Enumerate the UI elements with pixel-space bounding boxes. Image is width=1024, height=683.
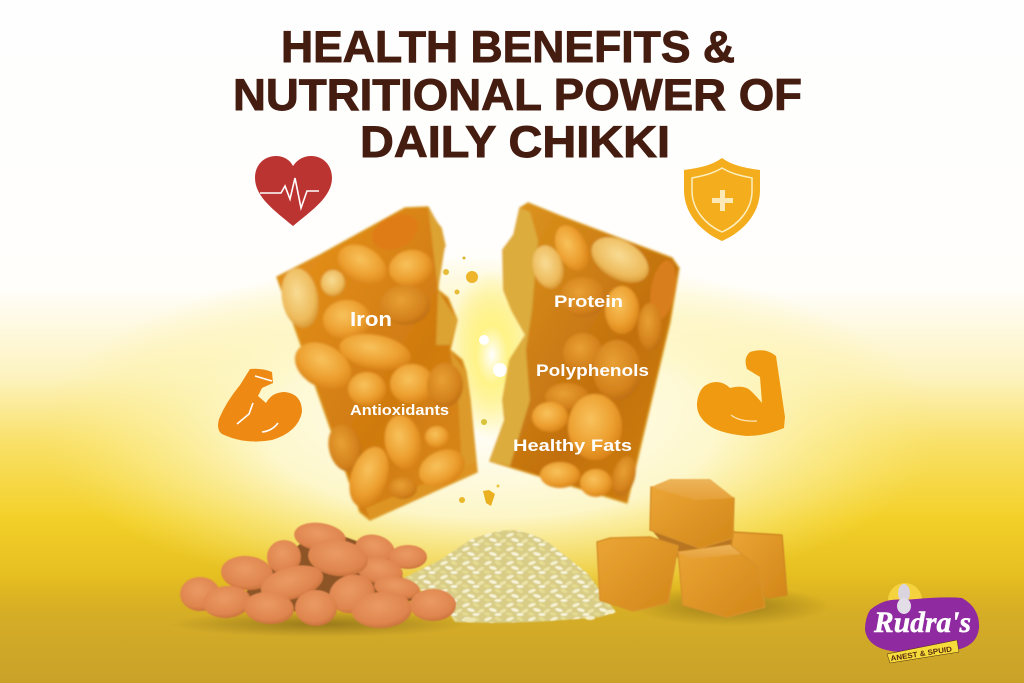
peanuts in left piece bbox=[277, 207, 471, 512]
glow and crumbs between the bars bbox=[443, 256, 537, 506]
title bbox=[233, 23, 802, 167]
front cube bbox=[678, 545, 765, 617]
peanut pile bbox=[180, 520, 456, 630]
title: HEALTH BENEFITS & bbox=[281, 23, 735, 72]
title: NUTRITIONAL POWER OF bbox=[233, 71, 802, 120]
logo ribbon: ANEST & SPUID bbox=[890, 644, 953, 663]
nutrient labels on the bars: Protein bbox=[554, 292, 623, 311]
logo: Rudra's: Rudra's bbox=[873, 606, 971, 639]
nutrient labels on the bars: Polyphenols bbox=[536, 361, 649, 380]
icon: left flexed arm bbox=[218, 369, 302, 442]
ground shadows bbox=[170, 586, 830, 637]
top cube bbox=[650, 479, 734, 548]
jaggery cubes bbox=[597, 479, 787, 617]
nutrient labels on the bars bbox=[350, 292, 649, 455]
sesame seed pile bbox=[400, 530, 616, 623]
logo: Rudra's bbox=[865, 583, 979, 663]
nutrient labels on the bars: Antioxidants bbox=[350, 402, 449, 419]
logo mascot bbox=[897, 584, 911, 614]
right chikki piece bbox=[490, 203, 680, 503]
peanuts in right piece bbox=[528, 220, 680, 498]
left cube bbox=[597, 537, 678, 611]
icon: shield with plus bbox=[684, 158, 760, 241]
nutrient labels on the bars: Healthy Fats bbox=[513, 436, 632, 455]
nutrient labels on the bars: Iron bbox=[350, 309, 392, 331]
icon: right flexed arm bbox=[697, 350, 785, 436]
icon: heart with pulse bbox=[255, 156, 332, 226]
back right cube bbox=[730, 532, 787, 598]
left chikki piece bbox=[277, 207, 477, 520]
title: DAILY CHIKKI bbox=[360, 118, 670, 167]
